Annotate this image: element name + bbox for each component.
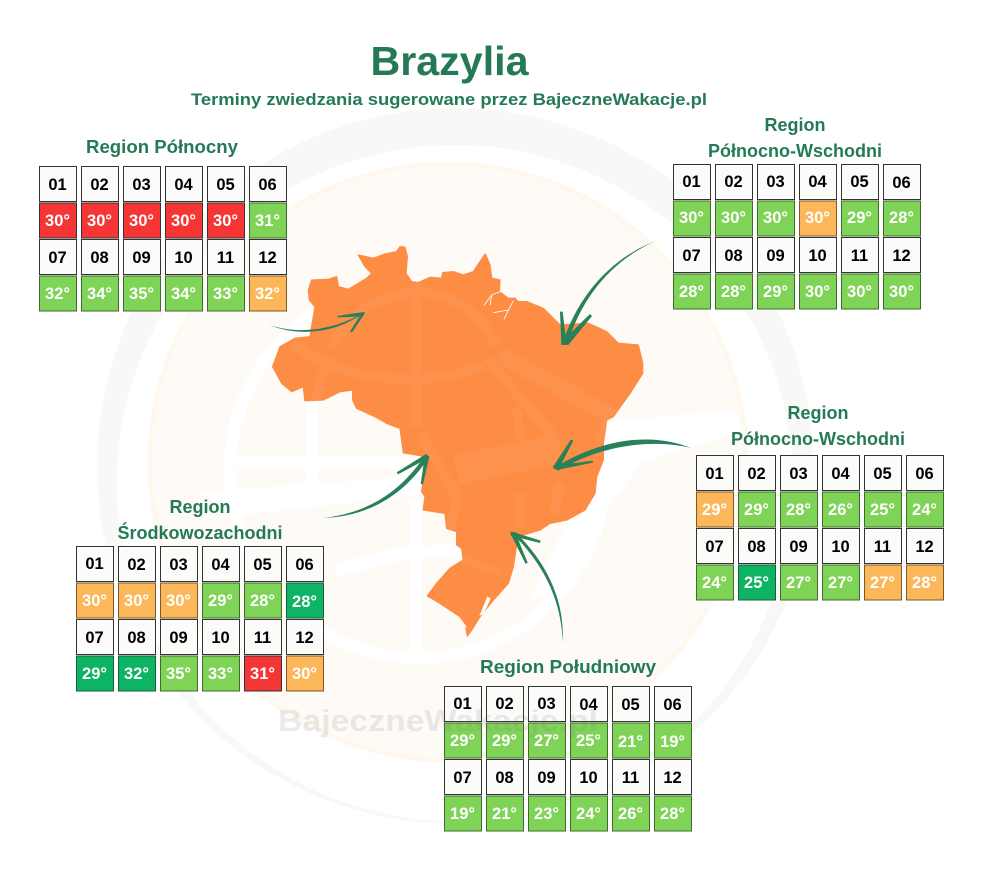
panel: Region Północno-Wschodni (right) calendar: 01 (705, 465, 724, 483)
panel: Region Środkowozachodni calendar: 11 (254, 629, 271, 647)
panel: Region Północno-Wschodni (top) calendar: 29° (847, 209, 872, 227)
panel: Region Środkowozachodni calendar: 08 (127, 629, 146, 647)
panel: Region Południowy calendar: 19° (660, 733, 685, 751)
panel: Region Środkowozachodni calendar: 09 (169, 629, 188, 647)
arrow: north region (269, 312, 365, 332)
panel: Region Środkowozachodni calendar: 12 (295, 629, 314, 647)
panel: Region Południowy calendar: 23° (534, 805, 559, 823)
panel: Region Środkowozachodni calendar: 35° (166, 665, 191, 683)
panel: Region Północno-Wschodni (right) calendar: 11 (874, 538, 891, 556)
panel: Region Północny calendar: 04 (174, 176, 193, 194)
panel: Region Południowy calendar: 24° (576, 805, 601, 823)
panel: Region Północno-Wschodni (top) calendar: 12 (892, 247, 911, 265)
heading: Region Północno-Wschodni (top): Północno-Wschodni (708, 141, 882, 161)
panel: Region Południowy calendar: 19° (450, 805, 475, 823)
panel: Region Północno-Wschodni (top) calendar: 11 (851, 247, 868, 265)
panel: Region Północno-Wschodni (top) calendar: 29° (763, 283, 788, 301)
panel: Region Północny calendar: 30° (171, 212, 196, 230)
panel: Region Północno-Wschodni (top) calendar: 30° (805, 283, 830, 301)
panel: Region Południowy calendar: 07 (453, 769, 472, 787)
panel: Region Południowy calendar: 21° (492, 805, 517, 823)
panel: Region Północny calendar: 33° (213, 285, 238, 303)
panel: Region Środkowozachodni calendar: 28° (250, 592, 275, 610)
panel: Region Południowy calendar: 06 (663, 696, 682, 714)
panel: Region Północny calendar: 35° (129, 285, 154, 303)
watermark text: BajeczneWakacje.pl (278, 703, 598, 738)
panel: Region Środkowozachodni calendar: 01 (85, 555, 104, 573)
panel: Region Północno-Wschodni (right) calendar: 08 (747, 538, 766, 556)
panel: Region Północno-Wschodni (right) calendar: 04 (831, 465, 850, 483)
panel: Region Północny calendar: 12 (258, 249, 277, 267)
panel: Region Północny calendar: 02 (90, 176, 109, 194)
heading: Region Środkowozachodni: Środkowozachodni (117, 522, 283, 543)
panel: Region Południowy calendar: 25° (576, 732, 601, 750)
panel: Region Północno-Wschodni (top) calendar: 28° (889, 209, 914, 227)
panel: Region Północno-Wschodni (right) calendar: 29° (744, 501, 769, 519)
panel: Region Środkowozachodni calendar: 30° (82, 592, 107, 610)
panel: Region Południowy calendar: 08 (495, 769, 514, 787)
panel: Region Północno-Wschodni (top) calendar: 02 (724, 173, 743, 191)
panel: Region Północno-Wschodni (top) calendar: 03 (766, 173, 785, 191)
panel: Region Środkowozachodni calendar: 30° (166, 592, 191, 610)
panel: Region Północny calendar: 05 (216, 176, 235, 194)
panel: Region Północno-Wschodni (right) calendar: 26° (828, 501, 853, 519)
panel: Region Północny calendar: 09 (132, 249, 151, 267)
panel: Region Północny calendar (40, 166, 286, 311)
panel: Region Północno-Wschodni (right) calendar: 28° (786, 501, 811, 519)
panel: Region Południowy calendar: 10 (579, 769, 598, 787)
panel: Region Środkowozachodni calendar (76, 546, 324, 691)
panel: Region Południowy calendar: 26° (618, 805, 643, 823)
panel: Region Północno-Wschodni (top) calendar: 07 (682, 247, 701, 265)
panel: Region Północny calendar: 32° (255, 285, 280, 303)
panel: Region Północno-Wschodni (right) calendar: 28° (912, 574, 937, 592)
panel: Region Północno-Wschodni (right) calendar: 10 (831, 538, 850, 556)
panel: Region Południowy calendar: 01 (453, 695, 472, 713)
panel: Region Północno-Wschodni (right) calendar: 27° (786, 574, 811, 592)
panel: Region Północno-Wschodni (right) calendar: 09 (789, 538, 808, 556)
arrow: central-west region (323, 454, 429, 518)
panel: Region Północny calendar: 30° (45, 212, 70, 230)
panel: Region Północno-Wschodni (right) calendar: 05 (873, 465, 892, 483)
panel: Region Północno-Wschodni (top) calendar: 28° (679, 283, 704, 301)
panel: Region Południowy calendar: 29° (450, 732, 475, 750)
panel: Region Północno-Wschodni (top) calendar: 30° (763, 209, 788, 227)
panel: Region Północno-Wschodni (right) calendar (696, 456, 944, 600)
panel: Region Północny calendar: 30° (213, 212, 238, 230)
title: Brazylia (370, 38, 530, 84)
panel: Region Północny calendar: 32° (45, 285, 70, 303)
panel: Region Środkowozachodni calendar: 30° (124, 592, 149, 610)
map of Brazil (273, 247, 643, 636)
panel: Region Północno-Wschodni (right) calendar: 27° (870, 574, 895, 592)
panel: Region Południowy calendar: 29° (492, 732, 517, 750)
panel: Region Środkowozachodni calendar: 04 (211, 556, 230, 574)
panel: Region Północno-Wschodni (right) calendar: 07 (705, 538, 724, 556)
panel: Region Północno-Wschodni (right) calendar: 12 (915, 538, 934, 556)
panel: Region Południowy calendar: 05 (621, 696, 640, 714)
heading: Region Północny: Region Północny (86, 137, 238, 157)
panel: Region Północno-Wschodni (right) calendar: 25° (870, 501, 895, 519)
panel: Region Środkowozachodni calendar: 29° (82, 665, 107, 683)
panel: Region Północno-Wschodni (top) calendar: 30° (847, 283, 872, 301)
panel: Region Północno-Wschodni (right) calendar: 24° (912, 501, 937, 519)
panel: Region Środkowozachodni calendar: 30° (292, 665, 317, 683)
panel: Region Południowy calendar: 02 (495, 695, 514, 713)
panel: Region Północno-Wschodni (top) calendar: 28° (721, 283, 746, 301)
panel: Region Południowy calendar: 03 (537, 695, 556, 713)
panel: Region Północno-Wschodni (top) calendar: 04 (808, 173, 827, 191)
panel: Region Środkowozachodni calendar: 05 (253, 556, 272, 574)
panel: Region Północno-Wschodni (top) calendar: 01 (682, 173, 701, 191)
panel: Region Północno-Wschodni (right) calendar: 27° (828, 574, 853, 592)
panel: Region Północny calendar: 07 (48, 249, 67, 267)
panel: Region Północno-Wschodni (top) calendar: 10 (808, 247, 827, 265)
arrow: south-east region (553, 439, 691, 471)
heading: Region Środkowozachodni: Region (170, 497, 230, 517)
panel: Region Północny calendar: 11 (217, 249, 234, 267)
panel: Region Północno-Wschodni (right) calendar: 06 (915, 465, 934, 483)
panel: Region Północny calendar: 03 (132, 176, 151, 194)
panel: Region Południowy calendar: 04 (579, 696, 598, 714)
heading: Region Północno-Wschodni (right): Północno-Wschodni (731, 429, 905, 449)
panel: Region Północno-Wschodni (right) calendar: 29° (702, 501, 727, 519)
panel: Region Północny calendar: 08 (90, 249, 109, 267)
heading: Region Południowy: Region Południowy (480, 657, 656, 677)
panel: Region Środkowozachodni calendar: 06 (295, 556, 314, 574)
panel: Region Środkowozachodni calendar: 32° (124, 665, 149, 683)
panel: Region Północno-Wschodni (top) calendar: 30° (721, 209, 746, 227)
panel: Region Północno-Wschodni (right) calendar: 24° (702, 574, 727, 592)
panel: Region Północno-Wschodni (top) calendar: 30° (805, 209, 830, 227)
panel: Region Północno-Wschodni (top) calendar: 30° (889, 283, 914, 301)
panel: Region Północno-Wschodni (right) calendar: 03 (789, 465, 808, 483)
watermark: globe logo background (97, 108, 813, 824)
panel: Region Południowy calendar: 09 (537, 769, 556, 787)
arrow: south region (510, 532, 563, 643)
arrow: north-east region (560, 241, 657, 345)
panel: Region Środkowozachodni calendar: 31° (250, 665, 275, 683)
panel: Region Północno-Wschodni (top) calendar (674, 164, 920, 309)
panel: Region Północny calendar: 10 (174, 249, 193, 267)
panel: Region Południowy calendar: 21° (618, 733, 643, 751)
panel: Region Północno-Wschodni (top) calendar: 30° (679, 209, 704, 227)
panel: Region Północny calendar: 01 (48, 176, 67, 194)
panel: Region Środkowozachodni calendar: 28° (292, 593, 317, 611)
panel: Region Środkowozachodni calendar: 03 (169, 556, 188, 574)
panel: Region Północny calendar: 30° (129, 212, 154, 230)
panel: Region Środkowozachodni calendar: 29° (208, 592, 233, 610)
panel: Region Północno-Wschodni (top) calendar: 08 (724, 247, 743, 265)
panel: Region Północno-Wschodni (top) calendar: 09 (766, 247, 785, 265)
panel: Region Północno-Wschodni (right) calendar: 02 (747, 465, 766, 483)
panel: Region Północny calendar: 31° (255, 212, 280, 230)
heading: Region Północno-Wschodni (right): Region (788, 403, 848, 423)
panel: Region Środkowozachodni calendar: 02 (127, 556, 146, 574)
panel: Region Północno-Wschodni (top) calendar: 05 (850, 173, 869, 191)
subtitle: Terminy zwiedzania sugerowane przez BajeczneWakacje.pl (191, 90, 707, 109)
panel: Region Północny calendar: 34° (87, 285, 112, 303)
panel: Region Środkowozachodni calendar: 10 (211, 629, 230, 647)
panel: Region Północny calendar: 30° (87, 212, 112, 230)
panel: Region Południowy calendar: 11 (622, 769, 639, 787)
panel: Region Południowy calendar: 27° (534, 732, 559, 750)
panel: Region Północny calendar: 06 (258, 176, 277, 194)
panel: Region Środkowozachodni calendar: 33° (208, 665, 233, 683)
panel: Region Południowy calendar: 12 (663, 769, 682, 787)
heading: Region Północno-Wschodni (top): Region (764, 115, 826, 135)
panel: Region Południowy calendar (444, 686, 692, 831)
panel: Region Północny calendar: 34° (171, 285, 196, 303)
panel: Region Południowy calendar: 28° (660, 805, 685, 823)
panel: Region Środkowozachodni calendar: 07 (85, 629, 104, 647)
panel: Region Północno-Wschodni (top) calendar: 06 (892, 174, 911, 192)
panel: Region Północno-Wschodni (right) calendar: 25° (744, 574, 769, 592)
